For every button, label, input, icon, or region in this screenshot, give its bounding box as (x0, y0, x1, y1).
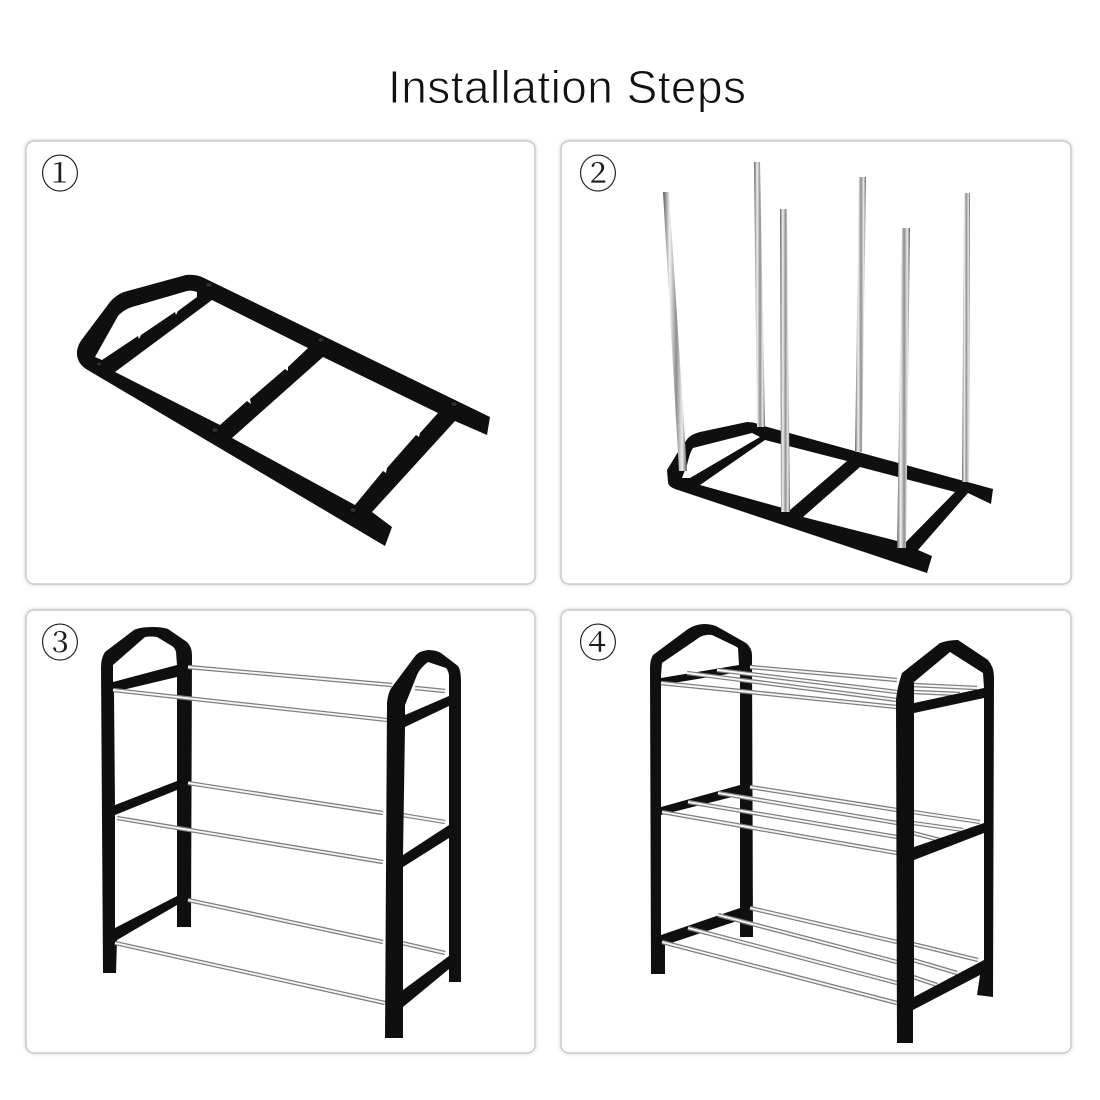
icon: assembled rack (650, 624, 994, 1043)
left end frame (650, 624, 753, 974)
poles (663, 162, 970, 548)
panel: step 1 (26, 141, 535, 584)
icon: base frame (77, 275, 490, 546)
step number 3: ③ (40, 623, 80, 666)
left end frame (101, 627, 192, 973)
panel: step 3 (26, 610, 535, 1053)
icon: base frame with poles (663, 162, 993, 573)
icon: rack with two rods per tier (101, 627, 461, 1038)
step number 4: ④ (578, 623, 618, 666)
title: Installation Steps (388, 61, 746, 113)
chrome rods (113, 667, 445, 1003)
panel: step 2 (561, 141, 1071, 584)
chrome rods (661, 667, 980, 1003)
step number 1: ① (40, 154, 80, 197)
screw holes (96, 282, 458, 512)
panel: step 4 (561, 610, 1071, 1053)
right end frame (896, 640, 994, 1043)
step number 2: ② (578, 154, 618, 197)
right end frame (385, 650, 461, 1038)
